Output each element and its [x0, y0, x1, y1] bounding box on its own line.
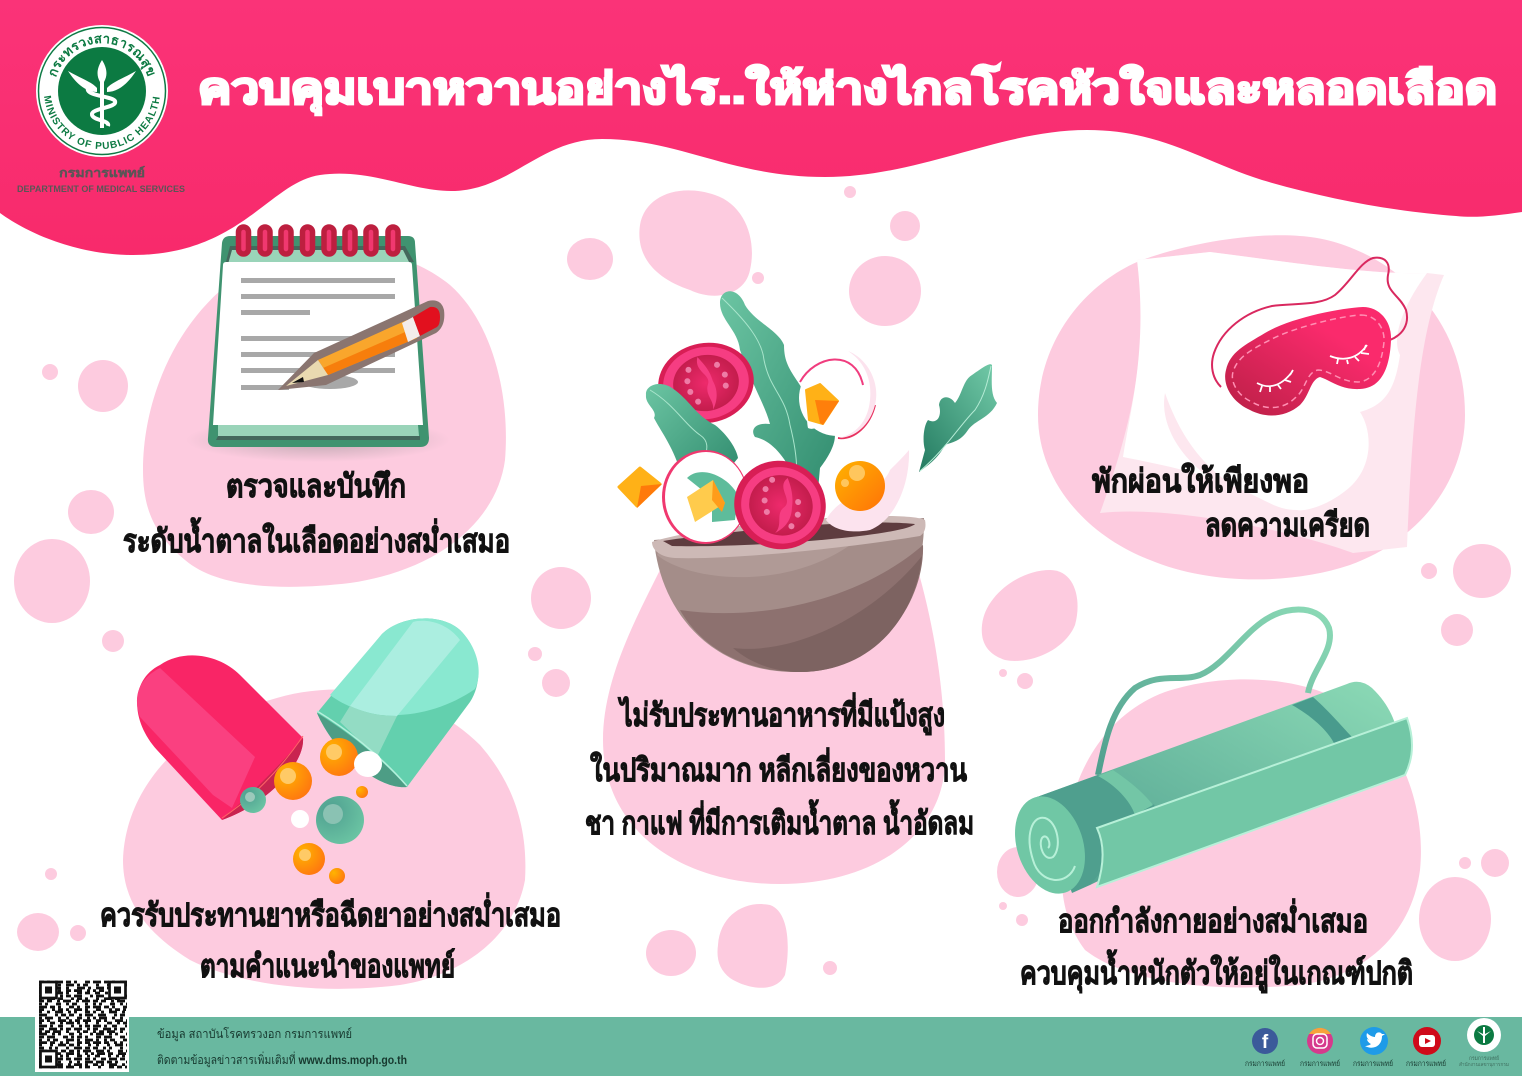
- illustration: notebook and pencil: [186, 227, 450, 462]
- icon: youtube: [1406, 1027, 1446, 1068]
- icon: youtube: กรมการแพทย์: [1406, 1059, 1446, 1068]
- text: take medicine: [100, 892, 561, 984]
- title: ควบคุมเบาหวานอย่างไร..ให้ห่างไกลโรคหัวใจและหลอดเลือด: [198, 64, 1497, 115]
- icon: twitter: [1353, 1027, 1393, 1068]
- icon: facebook: [1245, 1028, 1285, 1068]
- left cheese cube: [619, 468, 662, 508]
- text: check and record: ตรวจและบันทึก: [226, 468, 406, 504]
- text: food advice: ชา กาแฟ ที่มีการเติมน้ำตาล น้ำอัดลม: [585, 799, 974, 841]
- icon: facebook: กรมการแพทย์: [1245, 1059, 1285, 1068]
- decorative pink blobs: [14, 186, 1511, 988]
- side leaf: [919, 364, 997, 472]
- mat end spiral: [1003, 787, 1097, 903]
- small department logo: [1459, 1018, 1509, 1068]
- text: food advice: ในปริมาณมาก หลีกเลี่ยงของหวาน: [590, 747, 967, 788]
- mat flap: [1097, 718, 1412, 887]
- blob behind sleep mask: [1038, 235, 1465, 579]
- icon: facebook: f: [1262, 1032, 1269, 1053]
- footer source text: [157, 1027, 407, 1068]
- text: take medicine: ตามคำแนะนำของแพทย์: [200, 948, 455, 984]
- text: rest enough: พักผ่อนให้เพียงพอ: [1092, 462, 1309, 499]
- top tomato: [652, 335, 760, 431]
- footer source text: ติดตามข้อมูลข่าวสารเพิ่มเติมที่ www.dms.moph.go.th: [157, 1051, 407, 1068]
- logo: ministry of public health seal: MINISTRY OF PUBLIC HEALTH: [44, 96, 160, 149]
- text: check and record: [123, 468, 510, 559]
- illustration: capsule and pills: [137, 618, 479, 884]
- text: exercise: ออกกำลังกายอย่างสม่ำเสมอ: [1058, 898, 1368, 939]
- left ring with cube: [662, 450, 748, 544]
- text: exercise: [1020, 898, 1413, 994]
- small department logo: กรมการแพทย์: [1469, 1055, 1499, 1062]
- footer band: [0, 1017, 1522, 1076]
- blob behind notebook: [143, 248, 506, 587]
- pillow: [1100, 252, 1444, 553]
- icon: instagram: กรมการแพทย์: [1300, 1059, 1340, 1068]
- small department logo: สำนักงานเลขานุการกรม: [1459, 1062, 1509, 1068]
- text: food advice: [585, 692, 974, 841]
- strap: [1098, 609, 1330, 775]
- logo: ministry of public health seal: กระทรวงสาธารณสุข: [50, 35, 155, 77]
- cheese cube: [806, 384, 839, 425]
- illustration: pillow and sleep mask: [1100, 252, 1444, 553]
- department name: DEPARTMENT OF MEDICAL SERVICES: [17, 184, 185, 195]
- egg: [826, 450, 909, 531]
- rolled body: [1037, 682, 1397, 885]
- text: rest enough: [1092, 462, 1370, 543]
- pills: [240, 738, 382, 884]
- text: rest enough: ลดความเครียด: [1205, 507, 1370, 543]
- department name: กรมการแพทย์: [59, 166, 145, 180]
- QR code: [35, 978, 129, 1072]
- front tomato: [722, 448, 838, 562]
- illustration: salad bowl: [619, 291, 997, 672]
- blob behind capsule: [123, 689, 525, 989]
- text: check and record: ระดับน้ำตาลในเลือดอย่างสม่ำเสมอ: [123, 517, 510, 559]
- teal capsule half: [317, 618, 479, 787]
- footer source text: ข้อมูล สถาบันโรคทรวงอก กรมการแพทย์: [157, 1027, 352, 1042]
- department name: [17, 166, 185, 195]
- blob behind yoga mat: [1062, 679, 1421, 987]
- icon: instagram: [1300, 1028, 1340, 1068]
- bowl: [652, 516, 925, 672]
- mask strap: [1212, 258, 1407, 387]
- red capsule half: [137, 655, 303, 820]
- pink header banner with wavy edge: [0, 0, 1522, 255]
- illustration: yoga mat: [1003, 609, 1412, 903]
- text: exercise: ควบคุมน้ำหนักตัวให้อยู่ในเกณฑ์ปกติ: [1020, 949, 1413, 994]
- blob behind salad bowl: [603, 560, 945, 884]
- right ring: [799, 351, 876, 438]
- big leaf: [720, 291, 835, 510]
- mask: [1225, 307, 1391, 415]
- text: food advice: ไม่รับประทานอาหารที่มีแป้งสูง: [618, 692, 945, 736]
- logo: ministry of public health seal: [36, 25, 168, 157]
- left leaf: [646, 384, 738, 480]
- text: take medicine: ควรรับประทานยาหรือฉีดยาอย่างสม่ำเสมอ: [100, 892, 561, 933]
- icon: twitter: กรมการแพทย์: [1353, 1059, 1393, 1068]
